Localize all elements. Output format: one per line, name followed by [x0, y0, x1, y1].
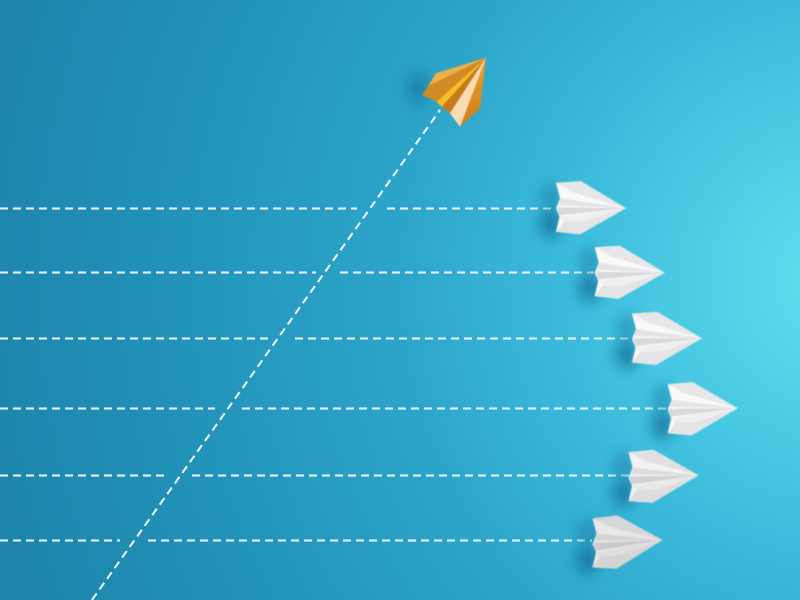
- white plane 3: [616, 311, 702, 369]
- gold plane: [407, 58, 486, 127]
- dashed flight paths: [0, 208, 668, 540]
- white plane 2: [579, 246, 665, 303]
- white plane 6: [576, 513, 662, 575]
- dashed diagonal path of gold plane: [92, 110, 440, 600]
- white plane 4: [652, 381, 738, 440]
- white plane 1: [540, 181, 626, 238]
- white plane 5: [612, 448, 698, 508]
